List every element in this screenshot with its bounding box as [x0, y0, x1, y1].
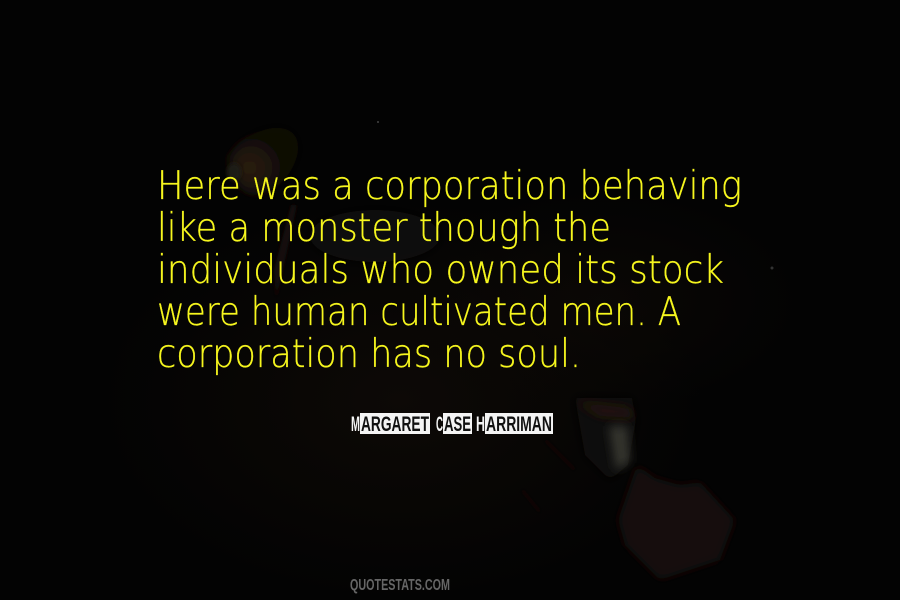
quote text: corporation has no soul. [157, 332, 581, 377]
quote text: Here was a corporation behaving [157, 164, 742, 209]
lower right: lit leaves [575, 398, 735, 580]
quote text: were human cultivated men. A [157, 290, 681, 335]
quote text: like a monster though the [157, 206, 611, 251]
attribution: author name: C [436, 413, 443, 436]
attribution: author name: ARRIMAN [486, 413, 552, 436]
mushroom cap glow [227, 128, 440, 300]
quote text [157, 164, 742, 377]
attribution: author name: M [351, 413, 360, 436]
attribution: author name: ASE [444, 413, 471, 436]
footer: site name: QUOTESTATS.COM [350, 577, 450, 594]
quote text: individuals who owned its stock [157, 248, 724, 293]
attribution: author name [351, 413, 553, 436]
attribution: author name: ARGARET [361, 413, 429, 436]
faint twig strokes [522, 440, 575, 512]
attribution: author name: H [476, 413, 485, 436]
